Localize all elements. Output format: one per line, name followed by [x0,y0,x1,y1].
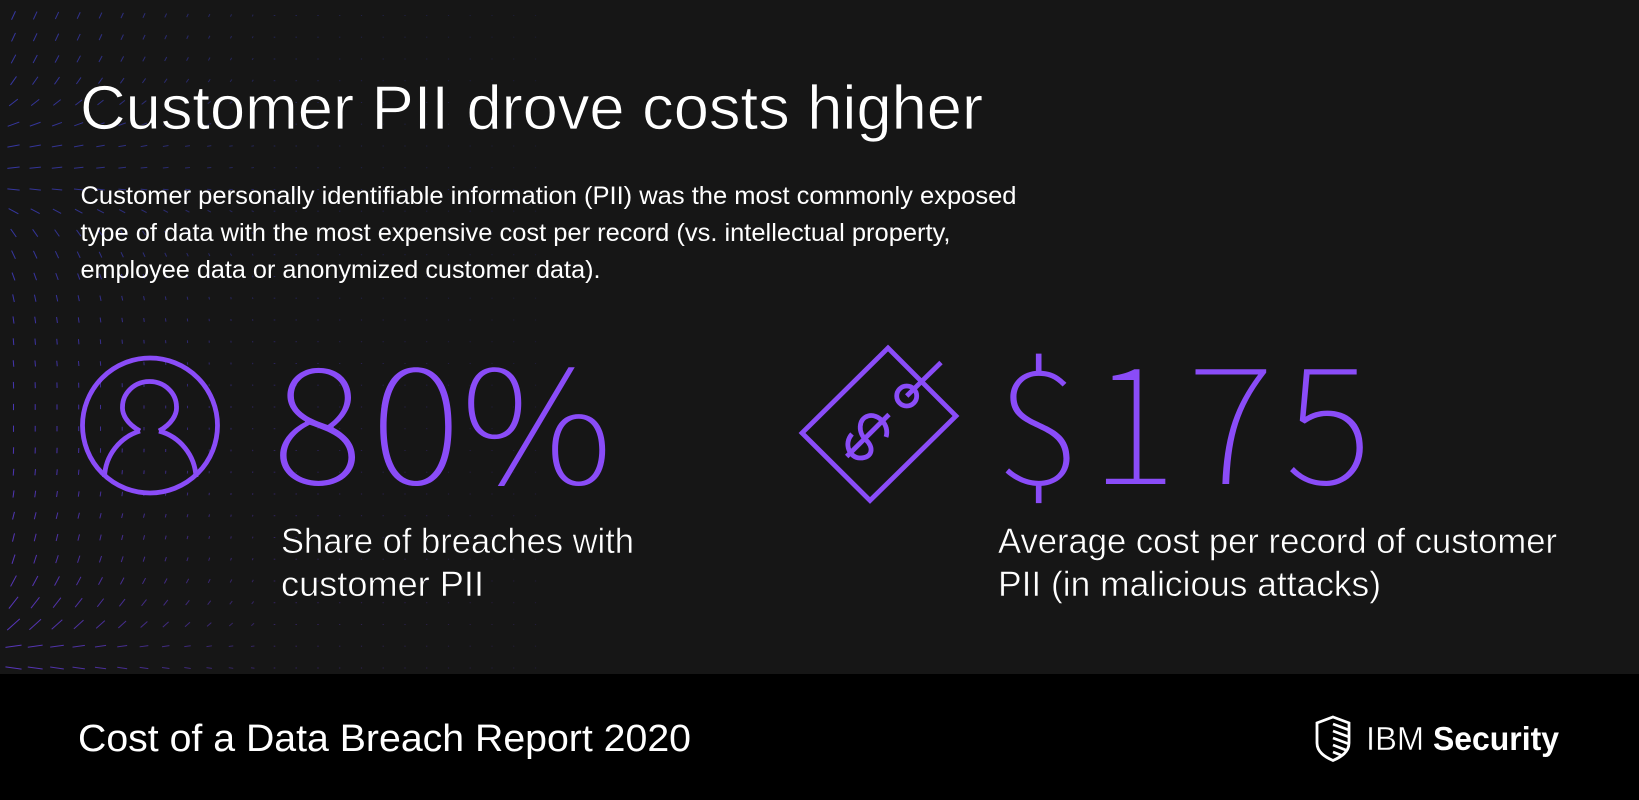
logo: IBM Security [1317,717,1560,760]
intro text block [80,182,1016,284]
intro text block: Customer personally identifiable information (PII) was the most commonly exposed [80,182,1016,210]
stat label: customer PII [281,565,484,604]
IBM wordmark: IBM [1366,720,1424,757]
stat label: Average cost per record of customer [998,522,1557,561]
footer bar [0,674,1639,800]
stat label: Share of breaches with [281,522,634,561]
panel: share of breaches [82,300,634,604]
intro text block: employee data or anonymized customer data). [80,256,600,284]
footer title: Cost of a Data Breach Report 2020 [78,718,691,760]
panel: cost per record [802,301,1557,604]
icon: shield [1317,717,1349,760]
icon: price tag [802,348,956,500]
title: Customer PII drove costs higher [80,74,983,143]
stat label [281,522,634,604]
stat: $175: $175 [994,301,1372,530]
Security wordmark: Security [1433,720,1560,757]
stat: 80%: 80% [272,300,613,530]
stat label: PII (in malicious attacks) [998,565,1381,604]
icon: person in circle [82,358,218,493]
intro text block: type of data with the most expensive cost per record (vs. intellectual property, [80,219,950,247]
stat label [998,522,1557,604]
